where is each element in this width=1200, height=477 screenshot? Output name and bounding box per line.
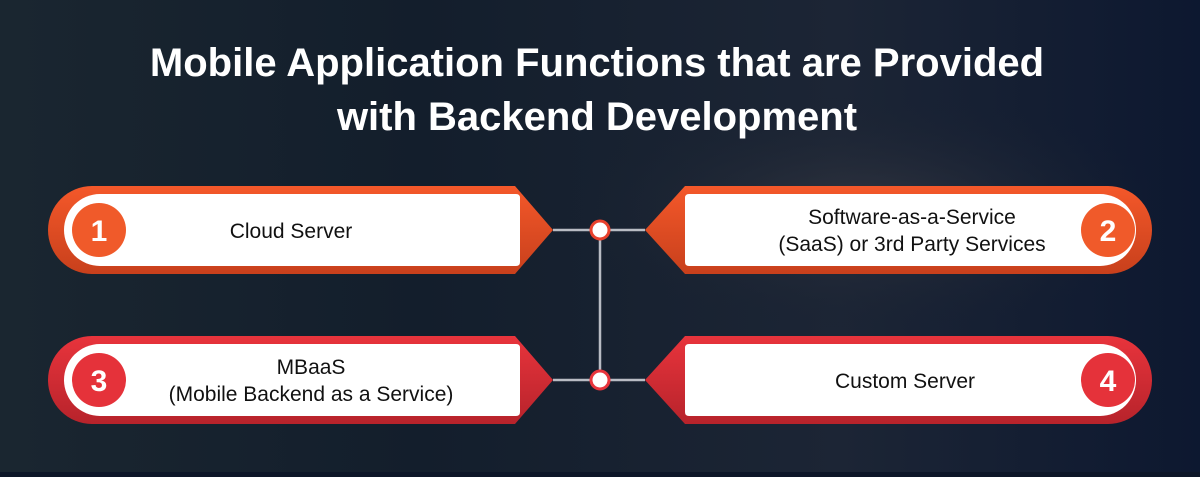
card 2: SaaS: Software-as-a-Service xyxy=(808,206,1016,229)
card 3: MBaaS: MBaaS xyxy=(277,356,345,379)
title xyxy=(150,41,1044,139)
card 3: MBaaS: (Mobile Backend as a Service) xyxy=(169,383,453,406)
title: with Backend Development xyxy=(336,95,857,139)
card 4: Custom Server: 4 xyxy=(1100,365,1117,398)
card 1: Cloud Server: 1 xyxy=(91,215,107,248)
card 3: MBaaS xyxy=(48,336,553,424)
card 2: SaaS xyxy=(645,186,1152,274)
connector lines xyxy=(553,221,645,389)
card 1: Cloud Server: Cloud Server xyxy=(230,220,352,243)
card 3: MBaaS: 3 xyxy=(91,365,107,398)
card 2: SaaS: (SaaS) or 3rd Party Services xyxy=(778,233,1046,256)
card 2: SaaS: 2 xyxy=(1100,215,1116,248)
card 1: Cloud Server xyxy=(48,186,553,274)
title: Mobile Application Functions that are Provided xyxy=(150,41,1044,85)
card 4: Custom Server: Custom Server xyxy=(835,370,975,393)
card 4: Custom Server xyxy=(645,336,1152,424)
